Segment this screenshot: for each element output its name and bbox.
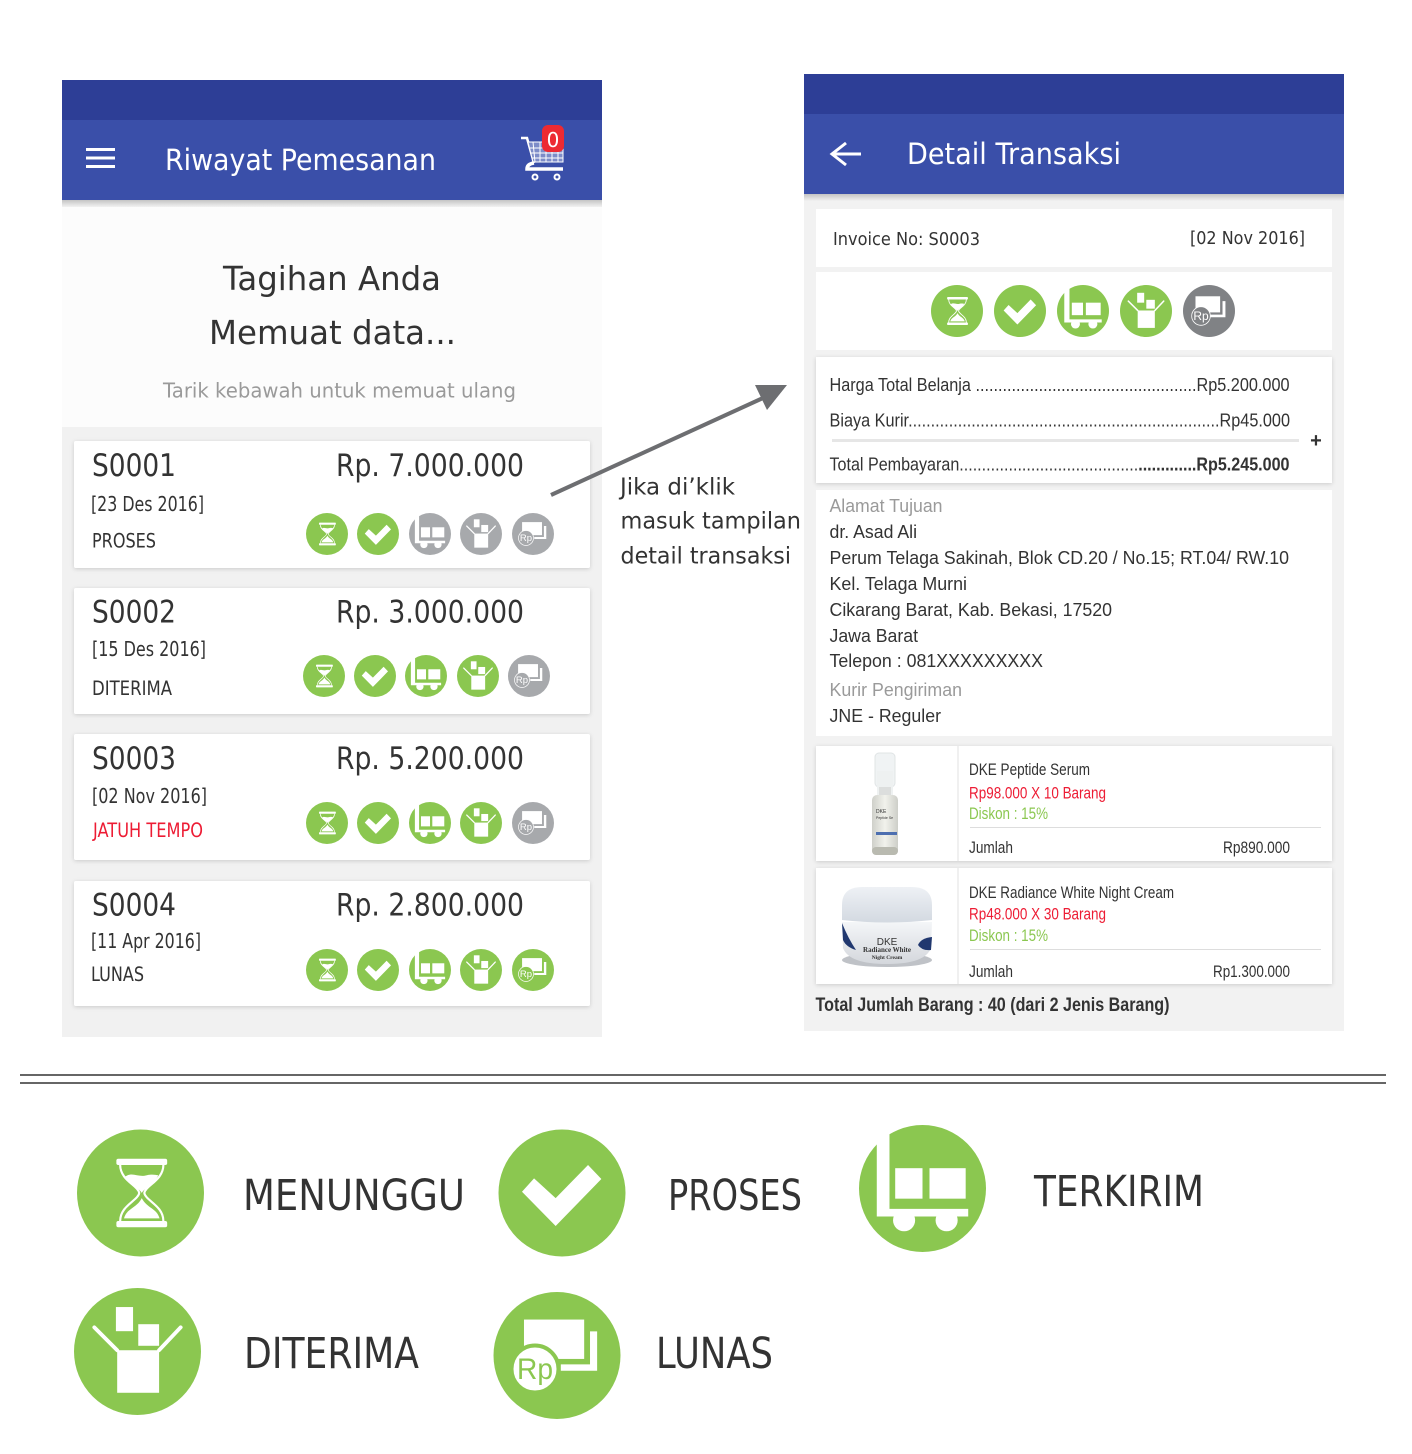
panel: product DKE Radiance White Night Cream: Rp48.000 X 30 Barang xyxy=(969,904,1106,924)
product photo: cream jar xyxy=(842,887,932,967)
panel: product DKE Peptide Serum: DKE Peptide Serum xyxy=(969,760,1090,779)
panel: shipping address: Kurir Pengiriman xyxy=(830,680,962,700)
status icons: Rp xyxy=(520,822,532,833)
icon: menunggu hourglass xyxy=(77,1130,204,1256)
order amount: Rp. 7.000.000 xyxy=(336,448,524,484)
panel: payment summary: Total Pembayaran.....................................................Rp5.245.000 xyxy=(830,454,1290,474)
card: S0004 xyxy=(74,881,590,1006)
panel: status icons xyxy=(816,272,1332,350)
phone screen: Detail Transaksi xyxy=(804,74,1344,1031)
status bar xyxy=(804,74,1344,114)
status icons xyxy=(306,949,554,991)
product photo: cream jar: DKE xyxy=(877,937,898,948)
card: S0003 xyxy=(74,734,590,860)
arrow: from list to detail xyxy=(551,385,787,495)
heading: Detail Transaksi: Detail Transaksi xyxy=(907,137,1121,171)
phone screen: Riwayat Pemesanan xyxy=(62,80,602,1037)
panel: payment summary xyxy=(816,357,1332,483)
panel: shipping address: JNE - Reguler xyxy=(830,706,941,726)
callout: click explanation: Jika di’klik xyxy=(618,474,736,500)
panel: product DKE Peptide Serum: Jumlah xyxy=(969,838,1013,857)
panel: shipping address: Kel. Telaga Murni xyxy=(830,574,967,594)
status icons xyxy=(303,655,550,697)
icon: lunas payment: Rp xyxy=(517,1353,553,1386)
icon: shopping cart with badge: 0 xyxy=(547,128,559,152)
panel: invoice header xyxy=(816,209,1332,267)
order number: S0001 xyxy=(92,448,176,484)
icon: menu xyxy=(86,148,115,168)
product photo: cream jar: Night Cream xyxy=(872,955,903,961)
panel: product DKE Radiance White Night Cream: Jumlah xyxy=(969,962,1013,981)
product photo: cream jar: Radiance White xyxy=(863,946,911,954)
label: diterima: DITERIMA xyxy=(244,1329,419,1379)
order status: PROSES xyxy=(92,530,156,552)
order number: S0003 xyxy=(92,741,176,777)
order status: JATUH TEMPO xyxy=(91,819,203,842)
text: pull to refresh hint: Tarik kebawah untuk memuat ulang xyxy=(162,378,516,402)
panel: payment summary: + xyxy=(1310,430,1322,452)
text: total item count: Total Jumlah Barang : 40 (dari 2 Jenis Barang) xyxy=(816,995,1170,1016)
icon: diterima box xyxy=(74,1288,201,1415)
order date: [11 Apr 2016] xyxy=(91,929,201,953)
panel: product DKE Radiance White Night Cream: Diskon : 15% xyxy=(969,926,1048,945)
order number: S0004 xyxy=(92,888,176,924)
text: Memuat data: Memuat data... xyxy=(209,313,456,352)
icon: back arrow xyxy=(832,143,861,165)
order status: LUNAS xyxy=(91,963,144,986)
panel: invoice header: Invoice No: S0003 xyxy=(833,229,980,250)
label: lunas: LUNAS xyxy=(656,1329,773,1379)
panel: payment summary: Harga Total Belanja .................................................Rp5.200.000 xyxy=(830,375,1290,395)
product photo: serum bottle: Peptide Se xyxy=(876,816,893,820)
label: terkirim: TERKIRIM xyxy=(1033,1167,1204,1217)
status icons xyxy=(306,513,554,555)
heading: Riwayat Pemesanan: Riwayat Pemesanan xyxy=(165,143,436,177)
order date: [23 Des 2016] xyxy=(91,492,204,516)
callout: click explanation: masuk tampilan xyxy=(620,508,801,534)
panel: product DKE Peptide Serum xyxy=(816,746,1332,861)
panel: product DKE Peptide Serum: Rp98.000 X 10 Barang xyxy=(969,784,1106,802)
panel: shipping address: dr. Asad Ali xyxy=(830,522,917,542)
card: S0001 xyxy=(74,441,590,568)
panel: shipping address: Jawa Barat xyxy=(830,626,918,646)
product photo: serum bottle xyxy=(872,753,898,855)
status icons: Rp xyxy=(520,969,532,980)
panel: shipping address: Cikarang Barat, Kab. Bekasi, 17520 xyxy=(830,600,1112,620)
panel: product DKE Radiance White Night Cream: DKE Radiance White Night Cream xyxy=(969,883,1174,902)
app bar xyxy=(804,114,1344,194)
panel: shipping address xyxy=(816,490,1332,736)
panel: shipping address: Perum Telaga Sakinah, Blok CD.20 / No.15; RT.04/ RW.10 xyxy=(830,548,1289,568)
order number: S0002 xyxy=(92,594,176,630)
callout: click explanation xyxy=(618,474,801,570)
panel: product DKE Radiance White Night Cream: Rp1.300.000 xyxy=(1213,962,1290,981)
status icons: Rp xyxy=(516,675,528,686)
icon: shopping cart with badge xyxy=(521,125,564,180)
heading: Tagihan Anda: Tagihan Anda xyxy=(222,259,441,298)
panel: shipping address: Alamat Tujuan xyxy=(830,496,942,516)
order status: DITERIMA xyxy=(92,677,173,700)
legend: status icons xyxy=(74,1125,1204,1419)
order amount: Rp. 5.200.000 xyxy=(336,741,524,777)
panel: status icons: Rp xyxy=(1193,309,1209,323)
panel: product DKE Peptide Serum: Rp890.000 xyxy=(1223,838,1290,857)
card: S0002 xyxy=(74,588,590,714)
status icons: Rp xyxy=(520,533,532,544)
panel: product DKE Radiance White Night Cream xyxy=(816,868,1332,984)
app bar xyxy=(62,120,602,200)
panel: invoice header: [02 Nov 2016] xyxy=(1190,228,1305,249)
status bar xyxy=(62,80,602,120)
panel: payment summary: Biaya Kurir.....................................................................Rp45.000 xyxy=(830,410,1290,430)
label: menunggu: MENUNGGU xyxy=(243,1171,465,1221)
callout: click explanation: detail transaksi xyxy=(620,544,791,570)
order date: [15 Des 2016] xyxy=(92,637,206,661)
icon: lunas payment xyxy=(494,1292,620,1419)
order amount: Rp. 3.000.000 xyxy=(336,594,524,630)
panel: product DKE Peptide Serum: Diskon : 15% xyxy=(969,804,1048,823)
label: proses: PROSES xyxy=(668,1171,802,1221)
order date: [02 Nov 2016] xyxy=(92,784,207,808)
product photo: serum bottle: DKE xyxy=(876,809,887,815)
icon: proses check xyxy=(498,1130,626,1256)
order amount: Rp. 2.800.000 xyxy=(336,888,524,924)
icon: terkirim trolley xyxy=(859,1125,986,1252)
status icons xyxy=(306,802,554,844)
panel: shipping address: Telepon : 081XXXXXXXXX xyxy=(830,651,1043,671)
